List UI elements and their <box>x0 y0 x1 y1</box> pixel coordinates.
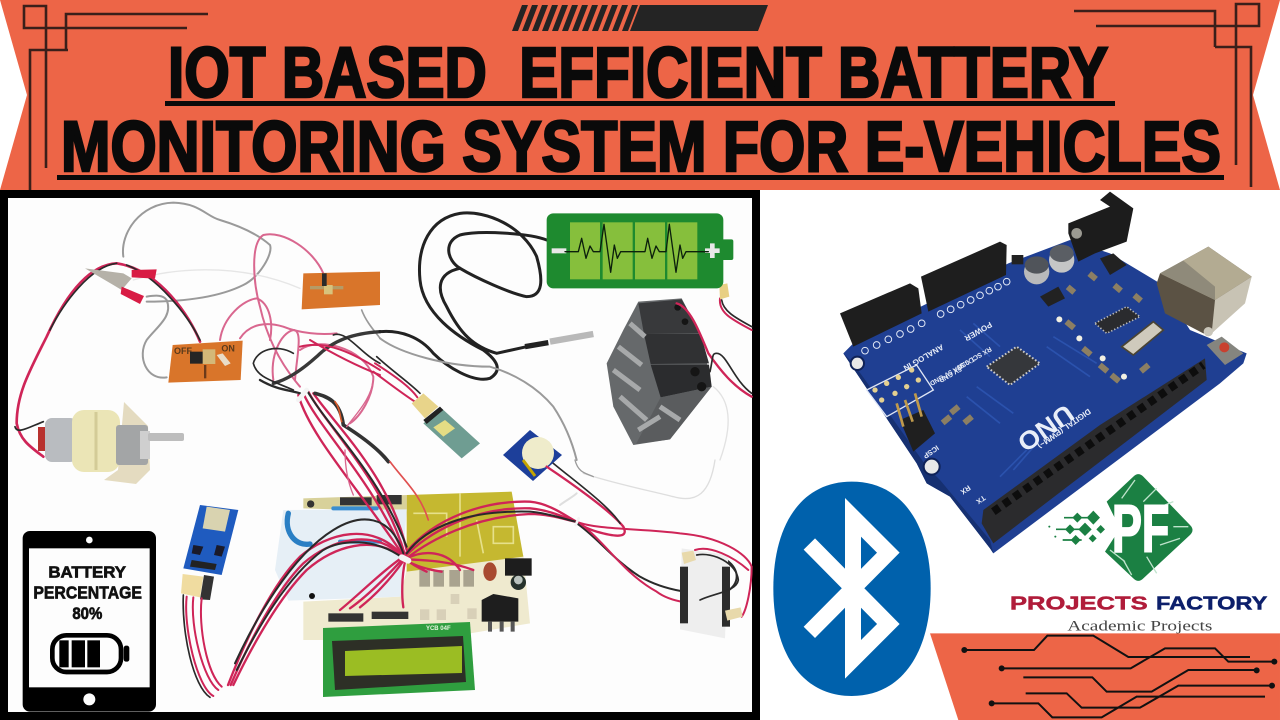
corner ornament: top left <box>24 6 208 190</box>
pcb traces <box>413 493 513 557</box>
push buttons <box>420 594 477 620</box>
tablet battery percentage callout <box>23 531 156 712</box>
board silkscreen labels: TX SDA 5V GND <box>928 355 976 386</box>
digital dots <box>1048 511 1105 545</box>
brand name <box>1010 592 1267 613</box>
digital header <box>982 358 1207 543</box>
small components <box>941 271 1151 425</box>
sd card module <box>181 505 238 697</box>
perfboard: on off switch: ON <box>221 343 235 353</box>
white shield <box>275 495 407 601</box>
board silkscreen labels: RX SCL 3.3V <box>954 345 992 371</box>
relay connectors <box>419 570 474 587</box>
board silkscreen labels: UNO <box>1012 398 1079 457</box>
voltage regulators <box>1012 253 1127 307</box>
temperature probe cable <box>380 213 593 460</box>
board silkscreen labels: RX <box>959 483 972 497</box>
projects factory logo <box>1010 474 1267 635</box>
perfboard: on off switch: OFF <box>174 346 192 356</box>
icsp header <box>897 393 935 452</box>
brand name: PROJECTS <box>1010 592 1148 613</box>
title line 1: IOT BASED EFFICIENT BATTERY <box>168 34 1108 113</box>
wires to esp module <box>547 463 752 617</box>
jumper headers <box>328 495 408 622</box>
dc jack <box>505 558 532 576</box>
capacitors <box>1024 245 1074 284</box>
corner ornament: top right <box>1074 4 1259 187</box>
tablet battery percentage callout: BATTERY <box>48 564 126 581</box>
central wire bundle <box>228 377 577 685</box>
header pads <box>862 278 1010 354</box>
board silkscreen labels: ANALOG IN <box>902 342 945 373</box>
microcontroller <box>987 347 1040 385</box>
ecg line <box>565 224 708 272</box>
plus sign <box>705 243 720 258</box>
power jack <box>1068 192 1133 262</box>
alligator clips <box>85 268 157 304</box>
circuit traces <box>964 636 1274 717</box>
board silkscreen labels: 5V GND <box>937 365 962 383</box>
minus sign <box>552 248 566 253</box>
lcd display <box>323 622 475 697</box>
perfboard: on off switch <box>168 341 243 383</box>
trace end points <box>961 647 1277 706</box>
analog and power headers <box>840 242 1007 347</box>
striped header bar <box>512 5 768 31</box>
panel: project photo <box>0 190 760 720</box>
pf emblem <box>1105 474 1192 581</box>
tablet battery percentage callout: 80% <box>72 604 102 623</box>
status leds <box>1056 316 1127 380</box>
battery glyph <box>52 635 129 672</box>
board silkscreen labels: TX <box>974 493 987 506</box>
bluetooth module <box>373 357 480 458</box>
title line 1 underline <box>165 101 1115 106</box>
title banner <box>0 0 1280 190</box>
reset button <box>1207 337 1243 365</box>
corner circuit panel <box>930 633 1280 720</box>
dc gear motor <box>38 402 184 484</box>
control board assembly <box>228 377 577 697</box>
board silkscreen labels: POWER <box>963 320 993 343</box>
pf emblem: PF <box>1112 493 1169 567</box>
title line 2 underline <box>57 175 1224 180</box>
battery pack <box>607 283 752 460</box>
board silkscreen labels: DIGITAL (PWM~) <box>1035 407 1092 450</box>
esp wifi module <box>680 548 748 638</box>
mounting holes <box>851 357 940 475</box>
perfboard: sensor <box>302 272 380 309</box>
electrolytic capacitors <box>483 562 526 590</box>
white wire <box>560 460 715 505</box>
board silkscreen labels: ICSP <box>921 443 941 461</box>
tablet battery percentage callout: PERCENTAGE <box>33 582 142 602</box>
lower beige board <box>303 555 530 640</box>
rtc module <box>503 430 562 481</box>
usb interface chip <box>1095 307 1140 333</box>
crystal <box>1122 322 1163 355</box>
pcb traces <box>960 323 1097 477</box>
bluetooth logo <box>773 482 931 696</box>
brand name: FACTORY <box>1156 592 1267 613</box>
icsp pads <box>867 365 933 417</box>
upper left wiring <box>15 203 380 457</box>
board silkscreen labels <box>902 320 1092 506</box>
arduino uno board <box>840 192 1252 553</box>
regulator heat sink <box>482 594 518 632</box>
yellow pcb <box>407 492 523 572</box>
pcb <box>843 240 1247 553</box>
lcd display: YCB 04F <box>426 626 451 632</box>
tagline: Academic Projects <box>1067 619 1213 635</box>
battery status icon <box>547 213 733 288</box>
usb connector <box>1157 247 1252 336</box>
